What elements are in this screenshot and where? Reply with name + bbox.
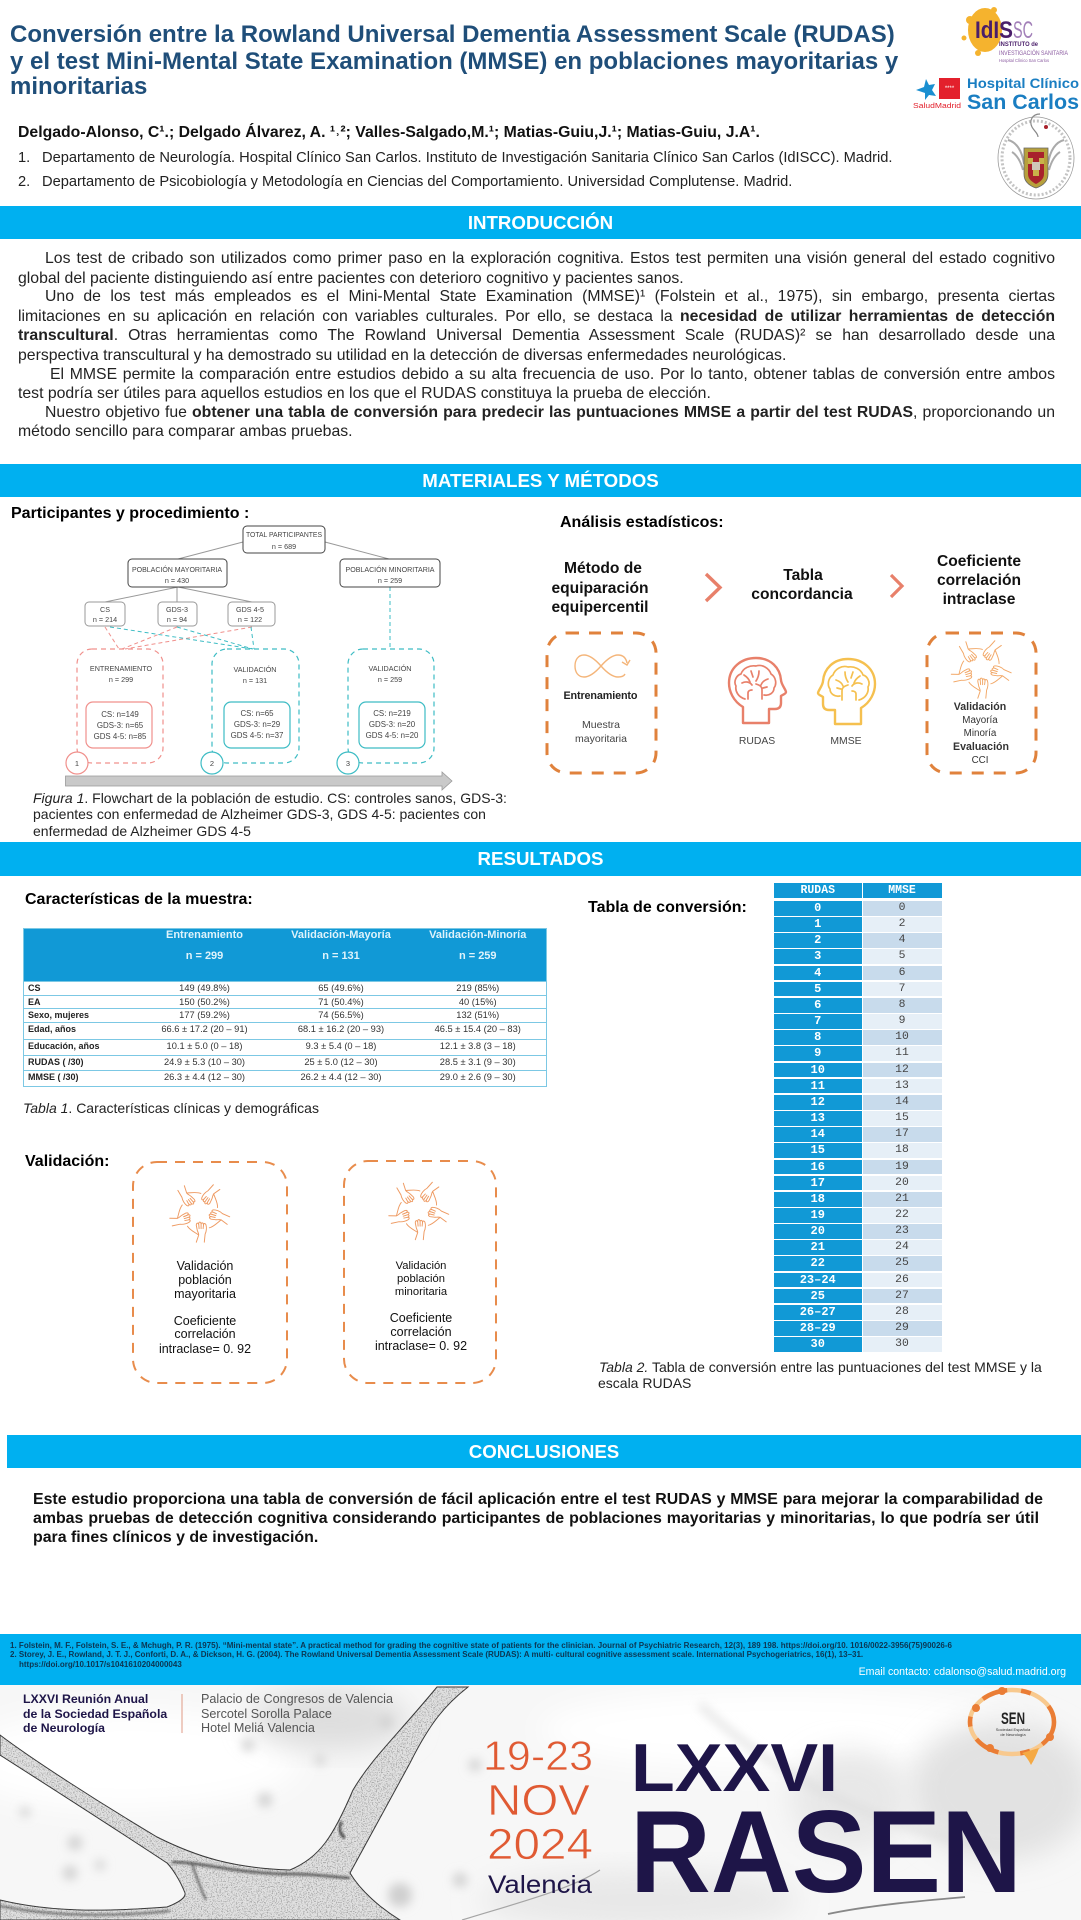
conference dates: 2024 [487, 1820, 593, 1869]
table: sample characteristics: 46.5 ± 15.4 (20 – 83) [435, 1024, 521, 1034]
introduction text: método sencillo para comparar ambas pruebas. [18, 423, 353, 440]
introduction text: test podría ser útiles para aquellos estudios en los que el RUDAS constituya la prueba de elección. [18, 385, 711, 402]
heading: validación: Validación: [25, 1153, 109, 1170]
introduction text: Uno de los test más empleados es el Mini-Mental State Examination (MMSE)¹ (Folstein et al., 1975), sin embargo, presenta ciertas [45, 288, 1055, 305]
logo: IdISSC: INSTITUTO de [999, 42, 1039, 48]
caption: figura 1: pacientes con enfermedad de Alzheimer GDS-3, GDS 4-5: pacientes con [33, 806, 486, 822]
panel: minority validation: población [397, 1273, 445, 1285]
table: sample characteristics: 24.9 ± 5.3 (10 – 30) [164, 1057, 245, 1067]
logo: Hospital Clínico San Carlos [913, 76, 1079, 112]
panel: minority validation: Coeficiente [390, 1311, 452, 1325]
title: minoritarias [10, 73, 147, 100]
panel: validation box [927, 633, 1036, 773]
table header: MMSE [888, 884, 916, 897]
panel: validation box: Mayoría [962, 715, 998, 726]
conclusions text: Este estudio proporciona una tabla de conversión de fácil aplicación entre el test RUDAS y MMSE para mejorar la comparabilidad de [33, 1491, 1043, 1508]
panel: validation box: Minoría [964, 728, 997, 739]
table: conversion RUDAS to MMSE: 8 [814, 1030, 821, 1044]
conference name: de la Sociedad Española [23, 1707, 167, 1721]
introduction text [18, 250, 1056, 440]
table: conversion RUDAS to MMSE: 1 [814, 917, 821, 931]
heading: materiales y métodos [0, 464, 1081, 497]
table: conversion RUDAS to MMSE: 18 [811, 1192, 825, 1206]
table: conversion RUDAS to MMSE: 7 [814, 1014, 821, 1028]
heading: intraclass correlation: intraclase [943, 591, 1016, 608]
table: conversion RUDAS to MMSE: 25 [895, 1257, 909, 1269]
table: sample characteristics: n = 259 [459, 950, 497, 962]
heading: method: equiparación [551, 580, 649, 597]
logo: Hospital Clínico San Carlos: SaludMadrid [913, 103, 961, 110]
arrow: first chevron [706, 574, 720, 601]
table: sample characteristics: 9.3 ± 5.4 (0 – 18) [306, 1041, 376, 1051]
panel: majority validation: correlación [174, 1327, 236, 1341]
table: conversion RUDAS to MMSE: 26–27 [800, 1305, 836, 1319]
table: conversion RUDAS to MMSE: 13 [895, 1080, 909, 1092]
table: sample characteristics: Entrenamiento [166, 928, 243, 940]
table: sample characteristics: Edad, años [28, 1024, 76, 1034]
venues: Hotel Meliá Valencia [201, 1721, 315, 1735]
table: conversion RUDAS to MMSE: 12 [811, 1095, 825, 1109]
table: sample characteristics: 68.1 ± 16.2 (20 – 93) [298, 1024, 384, 1034]
table: conversion RUDAS to MMSE: 23–24 [800, 1273, 836, 1287]
flowchart: GDS 4-5: n=85 [94, 732, 147, 741]
table: conversion RUDAS to MMSE: 30 [811, 1337, 825, 1351]
table: conversion RUDAS to MMSE: 0 [814, 901, 821, 915]
panel: majority validation: población [178, 1273, 232, 1287]
logo: IdISSC: IdIS [975, 17, 1013, 44]
logo: SEN: de Neurología [1000, 1732, 1026, 1737]
panel: majority validation [133, 1162, 287, 1383]
table: conversion RUDAS to MMSE: 21 [895, 1193, 909, 1205]
table: conversion RUDAS to MMSE: 2 [814, 933, 821, 947]
event number: LXXVI [631, 1730, 838, 1806]
table: sample characteristics: 28.5 ± 3.1 (9 – 30) [440, 1057, 516, 1067]
table: conversion RUDAS to MMSE: 20 [811, 1224, 825, 1238]
heading: conclusiones: CONCLUSIONES [469, 1441, 619, 1462]
title [10, 21, 898, 100]
table: conversion RUDAS to MMSE: 7 [899, 983, 905, 995]
heading: method [551, 560, 649, 616]
conference name: de Neurología [23, 1721, 105, 1735]
caption: tabla 2: escala RUDAS [598, 1375, 691, 1391]
event name: RASEN [630, 1786, 1022, 1917]
panel: validation cards [132, 1160, 497, 1384]
flowchart: VALIDACIÓN [368, 664, 412, 673]
heading: concordance table: concordancia [751, 586, 853, 603]
table: conversion RUDAS to MMSE [774, 901, 942, 1352]
table: sample characteristics: Educación, años [28, 1041, 100, 1051]
table header: RUDAS [800, 884, 835, 897]
logo: SEN [970, 1687, 1054, 1765]
caption: tabla 2 [598, 1359, 1042, 1391]
table: sample characteristics: 66.6 ± 17.2 (20 – 91) [161, 1024, 248, 1034]
panel: training box: mayoritaria [575, 733, 627, 745]
table: conversion RUDAS to MMSE: 11 [811, 1079, 825, 1093]
table: conversion RUDAS to MMSE: 3 [814, 949, 821, 963]
panel: minority validation [344, 1161, 496, 1383]
affiliations: 2. [18, 174, 30, 190]
introduction text: Los test de cribado son utilizados como primer paso en la exploración cognitiva. Estos test permiten una visión general del estado cognitivo [45, 250, 1055, 267]
table: conversion RUDAS to MMSE: 14 [895, 1096, 909, 1108]
table: sample characteristics: 29.0 ± 2.6 (9 – 30) [440, 1072, 516, 1082]
venues [201, 1692, 393, 1735]
table: conversion RUDAS to MMSE: 29 [895, 1322, 909, 1334]
introduction text: El MMSE permite la comparación entre estudios debido a su alta frecuencia de uso. Por lo tanto, obtener tablas de conversión entre ambos [50, 366, 1055, 383]
table: conversion RUDAS to MMSE: 22 [895, 1209, 909, 1221]
flowchart: POBLACIÓN MINORITARIA [346, 565, 435, 574]
logo: IdISSC: Hospital Clínico San Carlos [999, 58, 1050, 63]
flowchart: n = 299 [109, 675, 133, 684]
flowchart: n = 94 [167, 615, 187, 624]
table: conversion RUDAS to MMSE: 6 [814, 998, 821, 1012]
table: conversion RUDAS to MMSE: 14 [811, 1127, 825, 1141]
table header [774, 883, 942, 898]
heading: introducción [0, 206, 1081, 239]
panel: validation box: CCI [972, 755, 988, 766]
flowchart: GDS-3: n=65 [97, 721, 144, 730]
table: conversion RUDAS to MMSE: 0 [899, 902, 905, 914]
table: conversion RUDAS to MMSE: 11 [895, 1047, 909, 1059]
flowchart: 2 [210, 759, 214, 768]
table: conversion RUDAS to MMSE: 4 [814, 966, 821, 980]
flowchart: 1 [75, 759, 79, 768]
conclusions text: ambas pruebas de detección cognitiva considerando participantes de poblaciones mayoritarias y minoritarias, lo que podría ser útil [33, 1510, 1039, 1527]
panel: validation box: Evaluación [953, 741, 1009, 753]
heading: materiales y métodos: MATERIALES Y MÉTODOS [422, 470, 659, 491]
conclusions text: para fines clínicos y de investigación. [33, 1529, 318, 1546]
title: Conversión entre la Rowland Universal Dementia Assessment Scale (RUDAS) [10, 21, 895, 48]
flowchart: GDS-3: n=20 [369, 720, 416, 729]
heading: introducción: INTRODUCCIÓN [468, 212, 613, 233]
caption: tabla 2: Tabla 2. Tabla de conversión entre las puntuaciones del test MMSE y la [599, 1359, 1042, 1375]
heading: method: Método de [564, 560, 642, 577]
table: sample characteristics: Validación-Minoría [429, 928, 526, 940]
table: sample characteristics: 74 (56.5%) [318, 1010, 364, 1020]
flowchart: POBLACIÓN MAYORITARIA [132, 565, 222, 574]
neuron illustration [0, 1687, 468, 1920]
banner background [0, 1685, 1081, 1920]
heading: intraclass correlation: Coeficiente [937, 553, 1021, 570]
heading: method: equipercentil [551, 599, 649, 616]
panel: minority validation: correlación [390, 1325, 452, 1339]
heading: concordance table: Tabla [783, 567, 823, 584]
flowchart: CS [100, 605, 110, 614]
table: conversion RUDAS to MMSE: 28–29 [800, 1321, 836, 1335]
conference name: LXXVI Reunión Anual [23, 1692, 148, 1706]
heading: intraclass correlation: correlación [937, 572, 1021, 589]
references: 2. Storey, J. E., Rowland, J. T. J., Conforti, D. A., & Dickson, H. G. (2004). The Rowland Universal Dementia Assessment Scale (RUDAS): A multi- cultural cognitive assessment scale. International Psychogeriatrics, 16(1), 13–31. [10, 1650, 863, 1659]
conference name [23, 1692, 167, 1735]
table: sample characteristics [23, 928, 547, 1087]
panel: minority validation: Validación [396, 1260, 446, 1272]
heading: resultados [0, 842, 1081, 876]
authors: Delgado-Alonso, C¹.; Delgado Álvarez, A. ¹˒²; Valles-Salgado,M.¹; Matias-Guiu,J.¹; Matias-Guiu, J.A¹. [18, 124, 760, 141]
panel: training box [547, 633, 656, 773]
panel: majority validation: intraclase= 0. 92 [159, 1342, 251, 1356]
table: sample characteristics: Validación-Mayoría [291, 928, 391, 940]
table: conversion RUDAS to MMSE: 16 [811, 1160, 825, 1174]
table: conversion RUDAS to MMSE: 24 [895, 1241, 909, 1253]
conference dates: NOV [487, 1776, 591, 1825]
table: conversion RUDAS to MMSE: 5 [899, 950, 905, 962]
heading: concordance table [751, 567, 853, 603]
flowchart [65, 526, 452, 791]
logo: Hospital Clínico San Carlos: Hospital Clínico [967, 76, 1079, 91]
table: sample characteristics: MMSE ( /30) [28, 1072, 79, 1082]
table: conversion RUDAS to MMSE: 9 [814, 1046, 821, 1060]
affiliations: Departamento de Neurología. Hospital Clínico San Carlos. Instituto de Investigación Sanitaria Clínico San Carlos (IdISCC). Madrid. [42, 150, 892, 166]
flowchart: ENTRENAMIENTO [90, 664, 152, 673]
introduction text: global del paciente distinguiendo así entre pacientes con deterioro cognitivo y pacientes sanos. [18, 270, 684, 287]
venues: Sercotel Sorolla Palace [201, 1707, 332, 1721]
conference banner [0, 1685, 1081, 1920]
table: conversion RUDAS to MMSE: 8 [899, 999, 905, 1011]
heading: análisis estadísticos: Análisis estadísticos: [560, 514, 724, 531]
heading: tabla de conversión: Tabla de conversión: [588, 899, 747, 916]
panel: majority validation: Coeficiente [174, 1314, 236, 1328]
arrow: second chevron [891, 575, 902, 597]
flowchart: n = 259 [378, 675, 402, 684]
logo: IdISSC [962, 7, 1069, 63]
flowchart: n = 259 [378, 576, 402, 585]
table: sample characteristics: 219 (85%) [456, 983, 499, 993]
flowchart: GDS-3 [166, 605, 188, 614]
introduction text: perspectiva transcultural y ha demostrado su utilidad en la detección de diversas enfermedades neurológicas. [18, 347, 786, 364]
table: conversion RUDAS to MMSE: 15 [811, 1143, 825, 1157]
caption: figura 1 [33, 790, 507, 839]
icon: MMSE brain [818, 659, 875, 724]
introduction text: transcultural. Otras herramientas como The Rowland Universal Dementia Assessment Scale (RUDAS)² se han desarrollado desde una [18, 327, 1055, 344]
table: conversion RUDAS to MMSE: 30 [895, 1338, 909, 1350]
icon: RUDAS brain [729, 658, 786, 723]
table: conversion RUDAS to MMSE: 6 [899, 967, 905, 979]
statistical analysis diagram [546, 553, 1038, 774]
table: conversion RUDAS to MMSE: 28 [895, 1306, 909, 1318]
table: conversion RUDAS to MMSE: 19 [895, 1160, 909, 1172]
panel: training box: Muestra [582, 719, 620, 731]
table: conversion RUDAS to MMSE: 12 [895, 1064, 909, 1076]
panel: minority validation: minoritaria [395, 1286, 448, 1298]
logo: Hospital Clínico San Carlos: **** [945, 86, 955, 92]
table: conversion RUDAS to MMSE: 5 [814, 982, 821, 996]
table: sample characteristics: 149 (49.8%) [179, 983, 230, 993]
table: conversion RUDAS to MMSE: 26 [895, 1274, 909, 1286]
heading: características: Características de la muestra: [25, 891, 253, 908]
logo: university seal [998, 113, 1074, 200]
table: sample characteristics: Sexo, mujeres [28, 1010, 89, 1020]
table: sample characteristics: 26.3 ± 4.4 (12 – 30) [164, 1072, 245, 1082]
table: sample characteristics: EA [28, 997, 41, 1007]
table: sample characteristics: n = 299 [186, 950, 223, 962]
table: sample characteristics: 10.1 ± 5.0 (0 – 18) [167, 1041, 242, 1051]
panel: validation box: Validación [954, 701, 1006, 713]
table: sample characteristics: 150 (50.2%) [179, 997, 230, 1007]
table: conversion RUDAS to MMSE: 15 [895, 1112, 909, 1124]
flowchart: GDS-3: n=29 [234, 720, 281, 729]
caption: figura 1: enfermedad de Alzheimer GDS 4-5 [33, 823, 251, 839]
references: https://doi.org/10.1017/s1041610204000043 [19, 1660, 182, 1669]
caption: figura 1: Figura 1. Flowchart de la población de estudio. CS: controles sanos, GDS-3: [33, 790, 507, 806]
table: conversion RUDAS to MMSE: 20 [895, 1177, 909, 1189]
table: conversion RUDAS to MMSE: 9 [899, 1015, 905, 1027]
references [10, 1641, 952, 1669]
table: sample characteristics: 177 (59.2%) [179, 1010, 230, 1020]
panel: training box: Entrenamiento [564, 690, 638, 702]
table: sample characteristics: 71 (50.4%) [318, 997, 364, 1007]
conclusions text [33, 1491, 1043, 1546]
logo: SEN: SEN [1001, 1709, 1025, 1728]
table: sample characteristics: 26.2 ± 4.4 (12 – 30) [300, 1072, 382, 1082]
flowchart: n = 689 [272, 542, 296, 551]
table: conversion RUDAS to MMSE: 13 [811, 1111, 825, 1125]
flowchart: GDS 4-5: n=37 [231, 731, 283, 740]
conference dates [483, 1732, 593, 1869]
heading: participantes: Participantes y procedimiento : [11, 505, 249, 522]
caption: tabla 1: Tabla 1. Características clínicas y demográficas [23, 1100, 319, 1116]
flowchart: CS: n=219 [373, 709, 411, 718]
table: sample characteristics: 25 ± 5.0 (12 – 30) [304, 1057, 378, 1067]
heading: intraclass correlation [937, 553, 1021, 608]
contact email: Email contacto: cdalonso@salud.madrid.org [859, 1666, 1066, 1678]
table: conversion RUDAS to MMSE: 22 [811, 1256, 825, 1270]
table: sample characteristics: CS [28, 983, 41, 993]
affiliations: Departamento de Psicobiología y Metodología en Ciencias del Comportamiento. Universidad Complutense. Madrid. [42, 174, 792, 190]
table: conversion RUDAS to MMSE: 17 [811, 1176, 825, 1190]
title: y el test Mini-Mental State Examination (MMSE) en poblaciones mayoritarias y [10, 48, 898, 75]
affiliations: 1. [18, 150, 30, 166]
conference city: Valencia [488, 1871, 592, 1899]
divider [181, 1694, 183, 1733]
affiliations [18, 150, 892, 190]
table: sample characteristics: n = 131 [322, 950, 360, 962]
table: sample characteristics: 132 (51%) [456, 1010, 499, 1020]
table: sample characteristics: 40 (15%) [459, 997, 497, 1007]
references and contact bar [0, 1634, 1081, 1685]
flowchart: n = 131 [243, 676, 267, 685]
flowchart: n = 122 [238, 615, 262, 624]
flowchart: 3 [346, 759, 350, 768]
table: sample characteristics: 12.1 ± 3.8 (3 – 18) [440, 1041, 516, 1051]
table: conversion RUDAS to MMSE: 25 [811, 1289, 825, 1303]
table: sample characteristics: RUDAS ( /30) [28, 1057, 84, 1067]
table: conversion RUDAS to MMSE: 19 [811, 1208, 825, 1222]
table: conversion RUDAS to MMSE: 17 [895, 1128, 909, 1140]
panel: majority validation: Validación [177, 1259, 233, 1273]
table: sample characteristics: 65 (49.6%) [318, 983, 364, 993]
flowchart: VALIDACIÓN [233, 665, 277, 674]
table: conversion RUDAS to MMSE: 23 [895, 1225, 909, 1237]
logo: IdISSC: SC [1013, 17, 1033, 44]
flowchart: GDS 4-5: n=20 [366, 731, 419, 740]
table: conversion RUDAS to MMSE: 2 [899, 918, 905, 930]
table: conversion RUDAS to MMSE: 27 [895, 1290, 909, 1302]
heading: resultados: RESULTADOS [478, 848, 603, 869]
conference dates: 19-23 [483, 1732, 593, 1779]
panel: majority validation: mayoritaria [174, 1287, 236, 1301]
heading: conclusiones [7, 1435, 1081, 1468]
logo: SEN: Sociedad Española [996, 1727, 1031, 1732]
table: conversion RUDAS to MMSE: 4 [899, 934, 905, 946]
flowchart: TOTAL PARTICIPANTES [246, 530, 322, 539]
table: conversion RUDAS to MMSE: 18 [895, 1144, 909, 1156]
flowchart: n = 214 [93, 615, 117, 624]
flowchart: CS: n=149 [101, 710, 139, 719]
table: conversion RUDAS to MMSE: 21 [811, 1240, 825, 1254]
flowchart: GDS 4-5 [236, 605, 264, 614]
venues: Palacio de Congresos de Valencia [201, 1692, 393, 1706]
introduction text: Nuestro objetivo fue obtener una tabla de conversión para predecir las puntuaciones MMSE a partir del test RUDAS, proporcionando un [45, 404, 1055, 421]
flowchart: n = 430 [165, 576, 189, 585]
table: conversion RUDAS to MMSE: 10 [811, 1063, 825, 1077]
label: MMSE: MMSE [830, 736, 862, 747]
flowchart: CS: n=65 [240, 709, 274, 718]
introduction text: limitaciones en su aplicación en relación con variables culturales. Por ello, se destaca la necesidad de utilizar herramientas de detección [18, 308, 1055, 325]
table: conversion RUDAS to MMSE: 10 [895, 1031, 909, 1043]
panel: minority validation: intraclase= 0. 92 [375, 1339, 467, 1353]
references: 1. Folstein, M. F., Folstein, S. E., & Mchugh, P. R. (1975). “Mini-mental state”. A practical method for grading the cognitive state of patients for the clinician. Journal of Psychiatric Research, 12(3), 189 198. https://doi.org/10. 1016/0022-3956(75)90026-6 [10, 1641, 952, 1650]
label: RUDAS: RUDAS [739, 736, 775, 747]
